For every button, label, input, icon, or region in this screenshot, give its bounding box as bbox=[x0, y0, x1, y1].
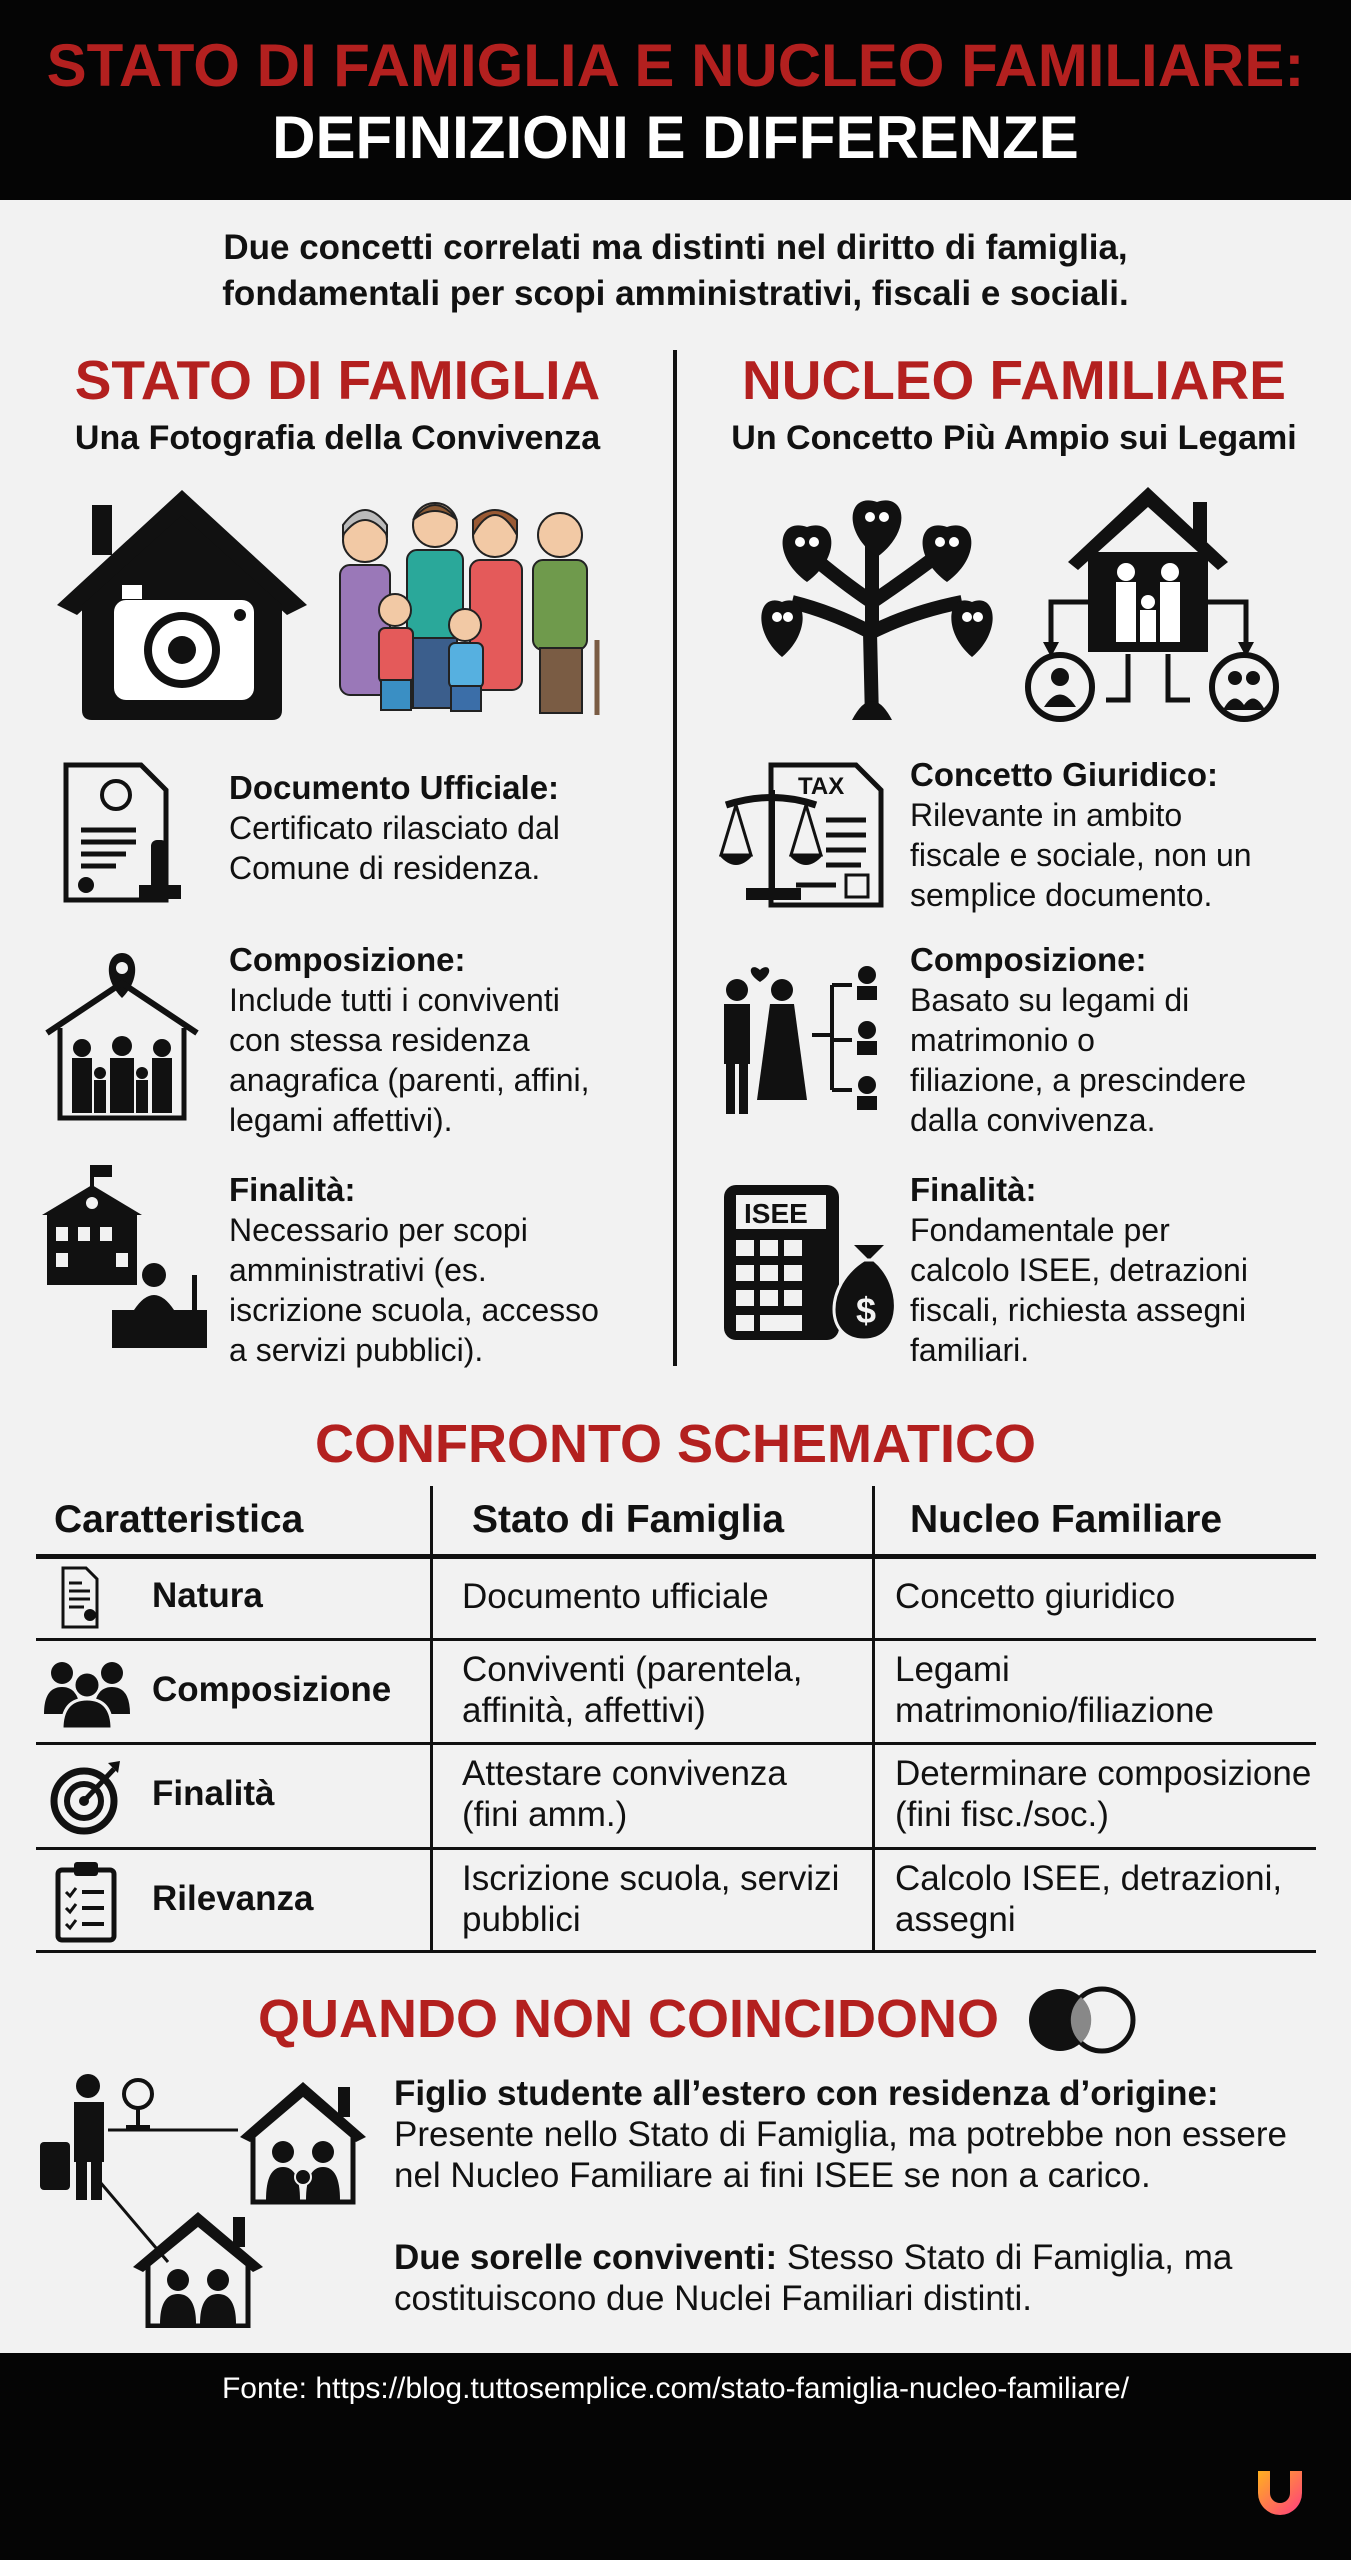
source text: Fonte: https://blog.tuttosemplice.com/stato-famiglia-nucleo-familiare/ bbox=[222, 2372, 1129, 2405]
icon: clipboard checklist bbox=[56, 1862, 116, 1942]
icon: house with family and arrows to persons bbox=[1025, 487, 1279, 722]
text: examples: Figlio studente all’estero con residenza d’origine: bbox=[394, 2074, 1219, 2113]
table header bbox=[54, 1498, 1222, 1541]
text: Composizione: bbox=[229, 941, 466, 978]
text: matrimonio o bbox=[910, 1022, 1095, 1058]
icon: school and office bbox=[42, 1165, 207, 1348]
row: rilevanza: Calcolo ISEE, detrazioni, bbox=[895, 1859, 1282, 1898]
text: Certificato rilasciato dal bbox=[229, 810, 560, 846]
text: examples bbox=[394, 2074, 1287, 2195]
icon: house with people and pin bbox=[45, 953, 199, 1120]
text: Fondamentale per bbox=[910, 1212, 1170, 1248]
icon: scales and tax doc: TAX bbox=[798, 773, 844, 800]
row: natura: Concetto giuridico bbox=[895, 1577, 1175, 1616]
row: composizione: Composizione bbox=[152, 1670, 391, 1709]
row: composizione: Conviventi (parentela, bbox=[462, 1650, 802, 1689]
text: a servizi pubblici). bbox=[229, 1332, 483, 1368]
left subheading: Una Fotografia della Convivenza bbox=[75, 419, 600, 457]
icon group: student abroad and houses bbox=[40, 2074, 366, 2328]
right item 2: composizione bbox=[724, 941, 1246, 1138]
text: Necessario per scopi bbox=[229, 1212, 528, 1248]
icon: group bbox=[44, 1662, 130, 1728]
row: finalita: Attestare convivenza bbox=[462, 1754, 787, 1793]
icon: ISEE calculator with money bag: ISEE bbox=[744, 1198, 808, 1229]
text: legami affettivi). bbox=[229, 1102, 452, 1138]
right subheading: Un Concetto Più Ampio sui Legami bbox=[731, 419, 1297, 457]
text: Documento Ufficiale: bbox=[229, 769, 559, 806]
row: rilevanza: Iscrizione scuola, servizi bbox=[462, 1859, 839, 1898]
text: con stessa residenza bbox=[229, 1022, 530, 1058]
icon: document bbox=[62, 1566, 98, 1628]
row: composizione bbox=[44, 1650, 1214, 1730]
icon: house with camera bbox=[57, 490, 307, 720]
row: rilevanza bbox=[56, 1859, 1282, 1942]
icon: family tree with hearts bbox=[761, 500, 993, 720]
left heading: STATO DI FAMIGLIA bbox=[75, 349, 600, 411]
table header: Stato di Famiglia bbox=[472, 1498, 784, 1541]
right heading: NUCLEO FAMILIARE bbox=[742, 349, 1286, 411]
text: fiscali, richiesta assegni bbox=[910, 1292, 1246, 1328]
text: Include tutti i conviventi bbox=[229, 982, 560, 1018]
section heading: quando non coincidono: QUANDO NON COINCIDONO bbox=[258, 1989, 999, 2049]
row: finalita bbox=[50, 1754, 1311, 1834]
text: Composizione: bbox=[910, 941, 1146, 978]
subtitle bbox=[222, 228, 1129, 313]
row: finalita: (fini fisc./soc.) bbox=[895, 1795, 1109, 1834]
text: fiscale e sociale, non un bbox=[910, 837, 1252, 873]
table header: Caratteristica bbox=[54, 1498, 303, 1541]
text: familiari. bbox=[910, 1332, 1029, 1368]
text: Basato su legami di bbox=[910, 982, 1189, 1018]
icon: family illustration bbox=[339, 502, 600, 715]
text: costituiscono due Nuclei Familiari distinti. bbox=[394, 2279, 1032, 2318]
text bbox=[910, 941, 1246, 1138]
icon: ISEE calculator with money bag bbox=[724, 1185, 894, 1340]
logo bbox=[1258, 2471, 1302, 2515]
icon: venn circles bbox=[1029, 1986, 1136, 2054]
text: amministrativi (es. bbox=[229, 1252, 487, 1288]
text: semplice documento. bbox=[910, 877, 1212, 913]
row: rilevanza: pubblici bbox=[462, 1900, 581, 1939]
text: Concetto Giuridico: bbox=[910, 756, 1218, 793]
icon: ISEE calculator with money bag: $ bbox=[856, 1290, 876, 1331]
right item 3: finalita bbox=[724, 1171, 1248, 1368]
text: anagrafica (parenti, affini, bbox=[229, 1062, 590, 1098]
row: composizione: affinità, affettivi) bbox=[462, 1691, 706, 1730]
text: iscrizione scuola, accesso bbox=[229, 1292, 599, 1328]
title line 2: DEFINIZIONI E DIFFERENZE bbox=[272, 104, 1079, 171]
left item 2: composizione bbox=[45, 941, 590, 1138]
text: Rilevante in ambito bbox=[910, 797, 1182, 833]
row: rilevanza: Rilevanza bbox=[152, 1879, 313, 1918]
icon: scales and tax doc bbox=[719, 762, 884, 908]
text: Comune di residenza. bbox=[229, 850, 540, 886]
right item 1: concetto giuridico bbox=[719, 756, 1252, 913]
left item 3: finalita bbox=[42, 1165, 599, 1368]
text: examples: Presente nello Stato di Famiglia, ma potrebbe non essere bbox=[394, 2115, 1287, 2154]
icon: certificate bbox=[64, 762, 181, 902]
footer band bbox=[0, 2353, 1351, 2560]
text bbox=[229, 941, 590, 1138]
text bbox=[229, 769, 560, 886]
text bbox=[910, 1171, 1248, 1368]
text bbox=[910, 756, 1252, 913]
row: finalita: Determinare composizione bbox=[895, 1754, 1311, 1793]
subtitle: fondamentali per scopi amministrativi, fiscali e sociali. bbox=[222, 274, 1129, 313]
text bbox=[229, 1171, 599, 1368]
row: finalita: Finalità bbox=[152, 1774, 275, 1813]
row: composizione: matrimonio/filiazione bbox=[895, 1691, 1214, 1730]
header band bbox=[0, 0, 1351, 200]
row: finalita: (fini amm.) bbox=[462, 1795, 627, 1834]
text: Due sorelle conviventi: Stesso Stato di Famiglia, ma bbox=[394, 2238, 1232, 2277]
text: Finalità: bbox=[229, 1171, 356, 1208]
subtitle: Due concetti correlati ma distinti nel diritto di famiglia, bbox=[223, 228, 1128, 267]
text: Finalità: bbox=[910, 1171, 1037, 1208]
row: natura: Natura bbox=[152, 1576, 263, 1615]
row: natura bbox=[62, 1566, 1175, 1628]
section heading: confronto schematico: CONFRONTO SCHEMATICO bbox=[315, 1414, 1036, 1474]
left item 1: documento ufficiale bbox=[64, 762, 560, 902]
icon: target bbox=[50, 1761, 120, 1834]
text: filiazione, a prescindere bbox=[910, 1062, 1246, 1098]
row: rilevanza: assegni bbox=[895, 1900, 1016, 1939]
title line 1: STATO DI FAMIGLIA E NUCLEO FAMILIARE: bbox=[47, 32, 1304, 99]
text: calcolo ISEE, detrazioni bbox=[910, 1252, 1248, 1288]
icon: couple with children tree bbox=[724, 966, 877, 1114]
text: examples: nel Nucleo Familiare ai fini ISEE se non a carico. bbox=[394, 2156, 1151, 2195]
row: natura: Documento ufficiale bbox=[462, 1577, 769, 1616]
table header: Nucleo Familiare bbox=[910, 1498, 1222, 1541]
row: composizione: Legami bbox=[895, 1650, 1010, 1689]
comparison table bbox=[36, 1486, 1316, 1953]
text: dalla convivenza. bbox=[910, 1102, 1155, 1138]
